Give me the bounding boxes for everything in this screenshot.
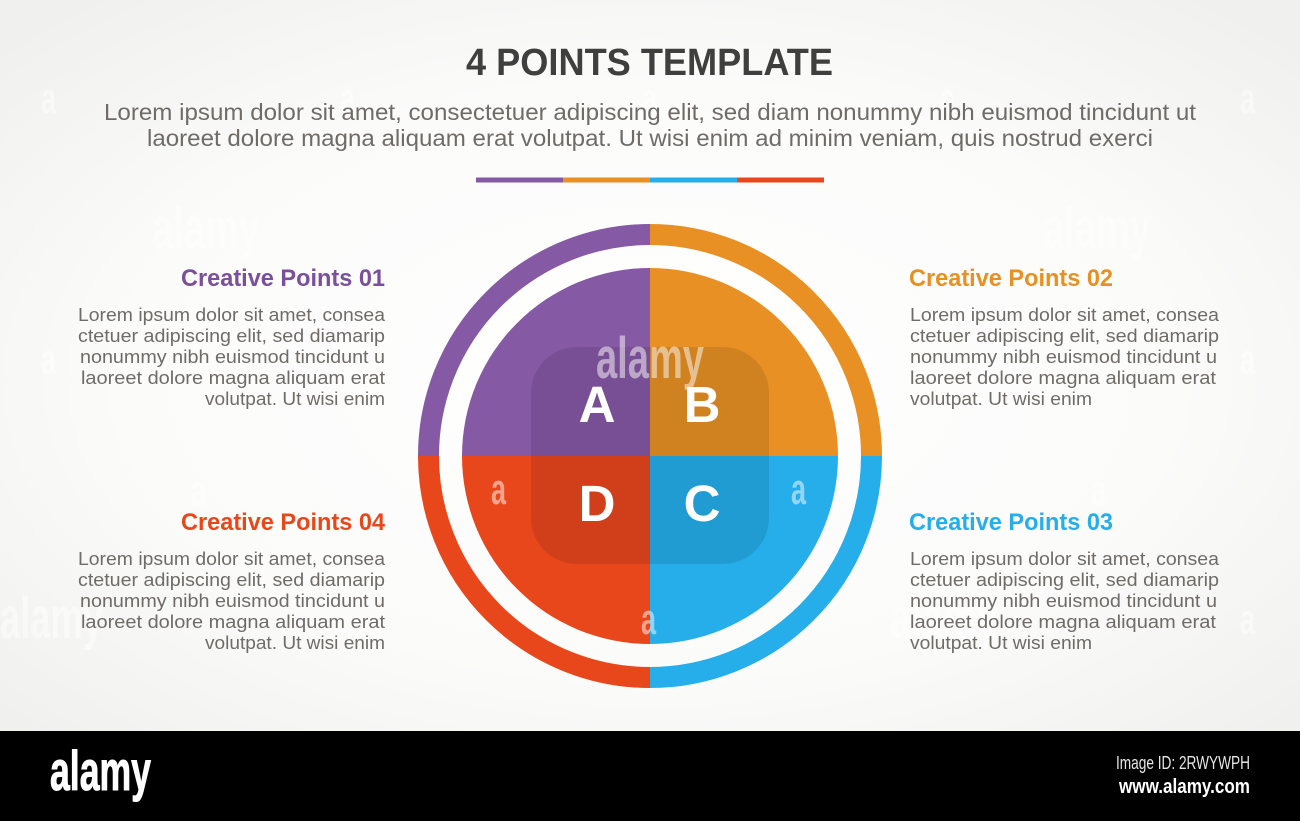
heading 04: Creative Points 04	[181, 509, 386, 536]
centre watermark	[491, 326, 806, 644]
panel: creative points 01	[78, 265, 386, 409]
faint background watermarks: a	[1240, 595, 1255, 644]
title: 4 POINTS TEMPLATE	[466, 42, 833, 84]
text block 03: laoreet dolore magna aliquam erat	[910, 612, 1216, 632]
quadrant letters: C	[684, 475, 720, 532]
heading 02: Creative Points 02	[909, 265, 1113, 292]
centre watermark: alamy	[596, 326, 704, 391]
text block 01: ctetuer adipiscing elit, sed diamarip	[78, 326, 385, 346]
panel: creative points 02	[909, 265, 1220, 409]
text block 02	[910, 305, 1220, 409]
text block 03: volutpat. Ut wisi enim	[910, 633, 1092, 653]
intro text: laoreet dolore magna aliquam erat volutpat. Ut wisi enim ad minim veniam, quis nostrud exerci	[147, 125, 1153, 151]
text block 04: laoreet dolore magna aliquam erat	[81, 612, 385, 632]
heading 03: Creative Points 03	[909, 509, 1113, 536]
image id: Image ID: 2RWYWPH	[1116, 753, 1250, 773]
text block 03: nonummy nibh euismod tincidunt u	[910, 591, 1217, 611]
text block 02: ctetuer adipiscing elit, sed diamarip	[910, 326, 1219, 346]
text block 02: volutpat. Ut wisi enim	[910, 389, 1092, 409]
text block 01: nonummy nibh euismod tincidunt u	[80, 347, 385, 367]
faint background watermarks	[0, 74, 1255, 651]
intro text: Lorem ipsum dolor sit amet, consectetuer adipiscing elit, sed diam nonummy nibh euismod tincidunt ut	[104, 99, 1196, 125]
text block 01	[78, 305, 386, 409]
quadrant letters	[579, 376, 720, 532]
faint background watermarks: a	[41, 74, 56, 123]
faint background watermarks: a	[940, 74, 955, 123]
footer logo: alamy	[50, 739, 151, 802]
text block 04: nonummy nibh euismod tincidunt u	[80, 591, 385, 611]
faint background watermarks: alamy	[1043, 196, 1151, 261]
centre watermark: a	[491, 465, 506, 514]
centre watermark: a	[641, 595, 656, 644]
four-colour divider	[476, 178, 824, 182]
text block 04: Lorem ipsum dolor sit amet, consea	[78, 549, 386, 569]
text block 04	[78, 549, 386, 653]
centre watermark: a	[791, 465, 806, 514]
faint background watermarks: a	[1091, 466, 1106, 515]
faint background watermarks: a	[191, 466, 206, 515]
footer bar	[0, 731, 1300, 821]
intro text	[104, 99, 1196, 151]
panel: creative points 03	[909, 509, 1220, 653]
text block 01: volutpat. Ut wisi enim	[205, 389, 385, 409]
faint background watermarks: alamy	[0, 586, 103, 651]
quadrant letters: D	[579, 475, 615, 532]
faint background watermarks: alamy	[152, 196, 260, 261]
text block 02: Lorem ipsum dolor sit amet, consea	[910, 305, 1220, 325]
text block 01: Lorem ipsum dolor sit amet, consea	[78, 305, 386, 325]
faint background watermarks: alamy	[890, 586, 998, 651]
faint background watermarks: a	[1240, 335, 1255, 384]
text block 02: laoreet dolore magna aliquam erat	[910, 368, 1216, 388]
text block 03: ctetuer adipiscing elit, sed diamarip	[910, 570, 1219, 590]
footer url: www.alamy.com	[1118, 776, 1250, 798]
faint background watermarks: a	[340, 74, 355, 123]
text block 01: laoreet dolore magna aliquam erat	[81, 368, 385, 388]
centre rounded square	[531, 347, 769, 564]
text block 03	[910, 549, 1220, 653]
panel: creative points 04	[78, 509, 386, 653]
faint background watermarks: a	[1240, 74, 1255, 123]
quadrant letters: A	[579, 376, 615, 433]
inner pie quadrants	[462, 268, 838, 644]
circular diagram	[428, 234, 872, 678]
heading 01: Creative Points 01	[181, 265, 385, 292]
faint background watermarks: a	[41, 335, 56, 384]
text block 04: volutpat. Ut wisi enim	[205, 633, 385, 653]
text block 02: nonummy nibh euismod tincidunt u	[910, 347, 1217, 367]
faint background watermarks: a	[642, 74, 657, 123]
text block 04: ctetuer adipiscing elit, sed diamarip	[78, 570, 385, 590]
quadrant letters: B	[684, 376, 720, 433]
outer ring	[428, 234, 872, 678]
text block 03: Lorem ipsum dolor sit amet, consea	[910, 549, 1220, 569]
